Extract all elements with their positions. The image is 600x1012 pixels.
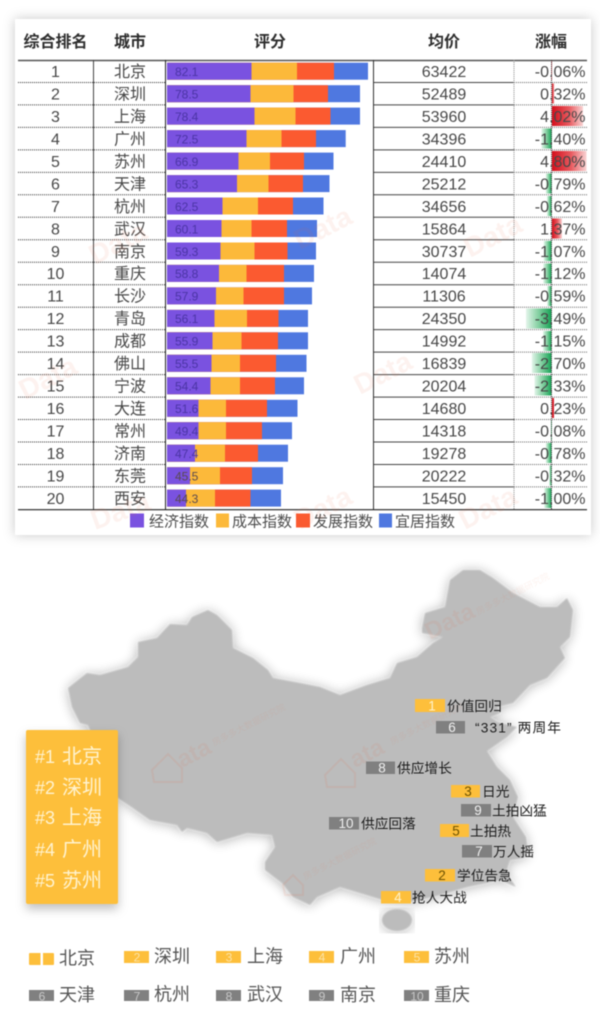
key 6: 天津 bbox=[59, 985, 95, 1005]
key 9: 南京 bbox=[340, 985, 376, 1005]
legend: score indices: 经济指数 bbox=[149, 514, 209, 530]
key 10: 10 bbox=[410, 990, 424, 1004]
column: average price: 52489 bbox=[422, 86, 466, 104]
bar row 18 bbox=[167, 445, 288, 462]
column: city names: 杭州 bbox=[114, 198, 146, 216]
column: price change percent: -0.08% bbox=[535, 424, 586, 440]
label 9: 9 bbox=[474, 803, 482, 818]
watermarks over table: Data bbox=[14, 350, 82, 405]
bar row 4 bbox=[167, 130, 346, 147]
key 2: 深圳 bbox=[154, 946, 190, 966]
legend: score indices: 发展指数 bbox=[313, 514, 373, 530]
key 2: 2 bbox=[134, 950, 141, 964]
column: average price: 14680 bbox=[422, 401, 466, 418]
bar row 20 bbox=[167, 490, 281, 507]
bar row 1: 82.1 bbox=[175, 65, 199, 79]
column: city names: 苏州 bbox=[114, 153, 146, 171]
table header row: 城市 bbox=[114, 32, 146, 51]
key 6: 6 bbox=[39, 990, 46, 1004]
column: average price: 24350 bbox=[422, 311, 466, 328]
column: rank numbers: 8 bbox=[51, 221, 60, 238]
label 2: 2 bbox=[438, 868, 446, 883]
column: price change percent: 0.23% bbox=[540, 401, 586, 418]
label 6: 6 bbox=[448, 720, 456, 735]
column: city names: 东莞 bbox=[114, 468, 146, 486]
key 10: 重庆 bbox=[434, 985, 470, 1005]
map: Hainan island bbox=[382, 909, 412, 931]
column: average price: 34396 bbox=[422, 131, 466, 148]
bar row 18: 47.4 bbox=[175, 447, 199, 461]
bar row 10: 58.8 bbox=[175, 267, 199, 281]
column: average price: 11306 bbox=[422, 289, 466, 306]
column: rank numbers: 12 bbox=[47, 311, 64, 328]
bar row 20: 44.3 bbox=[175, 492, 199, 506]
bar row 3 bbox=[167, 108, 360, 125]
bar row 19 bbox=[167, 467, 283, 484]
column: average price: 25212 bbox=[422, 176, 466, 193]
table header row: 评分 bbox=[254, 33, 286, 51]
map watermarks: 房多多大数据研究院 bbox=[210, 701, 287, 748]
key 2 bbox=[124, 946, 190, 966]
column: city names: 济南 bbox=[114, 445, 146, 463]
column: city names: 长沙 bbox=[114, 288, 146, 306]
column: city names bbox=[114, 63, 146, 508]
column: price change percent bbox=[535, 64, 586, 508]
column: price change percent: -1.12% bbox=[535, 266, 586, 283]
column: average price: 30737 bbox=[422, 244, 466, 261]
label 2: 学位告急 bbox=[457, 868, 512, 884]
key 8: 武汉 bbox=[247, 984, 283, 1004]
bar row 9 bbox=[167, 242, 316, 260]
column: price change percent: -0.78% bbox=[535, 446, 586, 463]
chart: stacked score bars bbox=[167, 63, 368, 507]
panel: city ranking table bbox=[14, 19, 591, 536]
bar row 17: 49.4 bbox=[175, 424, 199, 438]
column: rank numbers: 15 bbox=[47, 379, 64, 396]
column: price change percent: 4.02% bbox=[540, 109, 586, 126]
table header row: 均价 bbox=[428, 33, 460, 51]
map watermarks: 房多多大数据研究院 bbox=[474, 570, 551, 617]
map watermarks: 房多多大数据研究院 bbox=[301, 835, 378, 882]
column: city names: 重庆 bbox=[114, 265, 146, 283]
column: rank numbers: 20 bbox=[47, 491, 64, 508]
label 1: 1 bbox=[428, 698, 436, 714]
label 6: “331” 两周年 bbox=[475, 720, 561, 736]
column: average price: 53960 bbox=[422, 109, 466, 126]
legend: score indices: 成本指数 bbox=[232, 514, 292, 530]
column: city names: 北京 bbox=[114, 63, 146, 81]
bar row 7 bbox=[167, 198, 324, 214]
column: rank numbers: 7 bbox=[51, 199, 60, 216]
watermarks over table bbox=[14, 200, 527, 536]
key 9 bbox=[309, 985, 376, 1005]
label 1: 价值回归 bbox=[447, 698, 502, 714]
column: rank numbers: 16 bbox=[47, 401, 64, 418]
column: price change percent: -0.06% bbox=[535, 64, 586, 81]
column: price change percent: -1.15% bbox=[535, 334, 586, 351]
legend: city key bbox=[29, 946, 470, 1005]
legend: score indices bbox=[130, 514, 455, 530]
column: price change percent: -1.40% bbox=[535, 131, 586, 148]
column: rank numbers: 18 bbox=[47, 446, 64, 463]
callout: top 5 cities bbox=[26, 730, 118, 904]
column: price change percent: 1.37% bbox=[540, 221, 586, 238]
bar row 16 bbox=[167, 400, 298, 417]
column: price change percent: -1.07% bbox=[535, 244, 586, 261]
column: rank numbers: 1 bbox=[51, 64, 60, 81]
column: price change percent: -2.70% bbox=[535, 356, 586, 373]
bar row 4: 72.5 bbox=[175, 132, 199, 146]
table header row: 综合排名 bbox=[23, 32, 88, 51]
map watermarks bbox=[152, 570, 551, 895]
column: rank numbers: 5 bbox=[51, 154, 60, 171]
bar row 6 bbox=[167, 175, 330, 192]
bar row 7: 62.5 bbox=[175, 200, 199, 214]
column: city names: 上海 bbox=[114, 108, 146, 126]
label 3: 3 bbox=[464, 784, 472, 799]
column: city names: 深圳 bbox=[114, 86, 146, 104]
column: city names: 大连 bbox=[114, 400, 146, 418]
bar row 11: 57.9 bbox=[175, 290, 199, 304]
label 5: 土拍热 bbox=[470, 824, 511, 839]
column: average price: 34656 bbox=[422, 199, 466, 216]
label 5: 5 bbox=[452, 824, 460, 838]
column: price change percent: -0.32% bbox=[535, 468, 586, 486]
watermarks over table: Data bbox=[459, 208, 527, 263]
bar row 8 bbox=[167, 220, 317, 237]
key 7 bbox=[124, 984, 190, 1004]
bar row 6: 65.3 bbox=[175, 177, 199, 191]
label 1 bbox=[415, 698, 502, 714]
bar row 1 bbox=[167, 63, 368, 80]
column: average price: 24410 bbox=[422, 154, 466, 171]
column: rank numbers: 9 bbox=[51, 244, 60, 261]
key 4: 4 bbox=[319, 950, 326, 964]
label 8: 8 bbox=[378, 760, 386, 776]
label 3: 日光 bbox=[482, 784, 510, 800]
column: city names: 成都 bbox=[114, 333, 146, 351]
column: price change percent: 4.80% bbox=[540, 154, 586, 171]
bar row 9: 59.3 bbox=[175, 245, 199, 259]
watermarks over table: Data bbox=[454, 480, 522, 535]
key 5: 苏州 bbox=[434, 946, 470, 966]
bar row 12 bbox=[167, 310, 308, 327]
label 4: 4 bbox=[394, 890, 402, 905]
column: price change percent: -3.49% bbox=[535, 311, 586, 328]
label 3 bbox=[451, 784, 510, 800]
map watermarks: 房多多大数据研究院 bbox=[388, 700, 465, 747]
bar row 13: 55.9 bbox=[175, 335, 199, 349]
callout: top 5 cities: #2 深圳 bbox=[35, 776, 102, 799]
map watermarks: ata bbox=[345, 733, 389, 773]
key 8: 8 bbox=[226, 990, 233, 1004]
column: rank numbers bbox=[47, 64, 64, 508]
column: city names: 广州 bbox=[114, 130, 146, 148]
column: average price: 15450 bbox=[422, 491, 466, 508]
column: average price: 63422 bbox=[422, 64, 466, 81]
bar row 13 bbox=[167, 332, 308, 349]
map of China bbox=[68, 570, 573, 931]
key 7: 7 bbox=[134, 990, 141, 1004]
key 1: 北京 bbox=[59, 948, 95, 968]
column: city names: 常州 bbox=[114, 422, 146, 440]
legend: score indices: 宜居指数 bbox=[395, 514, 455, 530]
label 5 bbox=[440, 824, 511, 839]
callout: top 5 cities: #4 广州 bbox=[35, 838, 102, 861]
label 9 bbox=[461, 803, 547, 818]
column: city names: 武汉 bbox=[114, 220, 146, 238]
bar row 12: 56.1 bbox=[175, 312, 199, 326]
bar row 10 bbox=[167, 265, 314, 282]
column: average price: 14992 bbox=[422, 334, 466, 351]
column: rank numbers: 14 bbox=[47, 356, 64, 373]
column: average price bbox=[422, 64, 466, 508]
watermarks over table: Data bbox=[289, 480, 357, 535]
column: average price: 16839 bbox=[422, 356, 466, 373]
bar row 2 bbox=[167, 85, 360, 102]
column: rank numbers: 2 bbox=[51, 86, 60, 104]
column: rank numbers: 3 bbox=[51, 109, 60, 126]
bar row 14: 55.5 bbox=[175, 357, 199, 371]
bar row 5: 66.9 bbox=[175, 155, 199, 169]
key 6 bbox=[29, 985, 95, 1005]
bar row 14 bbox=[167, 355, 306, 372]
column: rank numbers: 10 bbox=[47, 266, 64, 283]
callout: top 5 cities: #1 北京 bbox=[35, 745, 102, 768]
bar row 5 bbox=[167, 153, 334, 170]
bar row 16: 51.6 bbox=[175, 402, 199, 416]
label 9: 土拍凶猛 bbox=[492, 804, 547, 818]
key 3: 上海 bbox=[247, 946, 283, 966]
column: rank numbers: 11 bbox=[47, 289, 64, 306]
label 7: 万人摇 bbox=[493, 844, 534, 860]
column: city names: 南京 bbox=[114, 243, 146, 261]
column: price change percent: -0.59% bbox=[535, 289, 586, 306]
key 10 bbox=[404, 985, 470, 1005]
key 1 bbox=[29, 948, 95, 968]
bar row 15 bbox=[167, 377, 304, 394]
key 4: 广州 bbox=[340, 946, 376, 966]
key 5: 5 bbox=[414, 950, 421, 964]
map labels bbox=[329, 698, 561, 906]
table header row bbox=[23, 32, 567, 51]
bar row 11 bbox=[167, 287, 312, 304]
key 9: 9 bbox=[319, 990, 326, 1004]
column: city names: 天津 bbox=[114, 175, 146, 193]
column: rank numbers: 6 bbox=[51, 176, 60, 193]
column: city names: 西安 bbox=[114, 490, 146, 508]
label 8: 供应增长 bbox=[397, 760, 452, 776]
bar row 15: 54.4 bbox=[175, 380, 199, 394]
key 4 bbox=[309, 946, 376, 966]
table header row: 涨幅 bbox=[535, 33, 567, 51]
watermarks over table: Data bbox=[349, 345, 417, 400]
column: average price: 15864 bbox=[422, 221, 466, 238]
bar row 3: 78.4 bbox=[175, 110, 199, 124]
label 10: 供应回落 bbox=[361, 816, 416, 832]
map watermarks: ata bbox=[172, 733, 216, 773]
watermarks over table: Data bbox=[86, 486, 154, 536]
label 10 bbox=[329, 816, 416, 832]
bar row 17 bbox=[167, 422, 292, 439]
label 4: 抢人大战 bbox=[412, 890, 467, 906]
column: average price: 19278 bbox=[422, 446, 466, 463]
map: mainland outline bbox=[68, 570, 573, 905]
column: price change percent: -2.33% bbox=[535, 379, 586, 396]
column: city names: 青岛 bbox=[114, 310, 146, 328]
column: rank numbers: 13 bbox=[47, 334, 64, 351]
label 8 bbox=[366, 760, 452, 776]
chart: price change bars bbox=[526, 61, 586, 508]
column: price change percent: -1.00% bbox=[535, 491, 586, 508]
label 6 bbox=[436, 720, 561, 736]
column: price change percent: -0.62% bbox=[535, 199, 586, 216]
key 8 bbox=[216, 984, 283, 1004]
key 3 bbox=[216, 946, 283, 966]
label 10: 10 bbox=[338, 816, 354, 831]
bar row 19: 45.5 bbox=[175, 470, 199, 484]
column: average price: 14074 bbox=[422, 266, 466, 283]
column: city names: 佛山 bbox=[114, 355, 146, 373]
key 3: 3 bbox=[226, 950, 233, 964]
column: average price: 14318 bbox=[422, 424, 466, 440]
column: price change percent: -0.79% bbox=[535, 176, 586, 193]
callout: top 5 cities: #5 苏州 bbox=[35, 869, 102, 892]
key 5 bbox=[404, 946, 470, 966]
key 7: 杭州 bbox=[154, 984, 190, 1004]
label 4 bbox=[381, 890, 467, 906]
column: rank numbers: 19 bbox=[47, 468, 64, 486]
bar row 8: 60.1 bbox=[175, 222, 199, 236]
map watermarks: Data bbox=[420, 597, 480, 645]
column: average price: 20204 bbox=[422, 379, 466, 396]
column: rank numbers: 17 bbox=[47, 424, 64, 440]
bar row 2: 78.5 bbox=[175, 88, 199, 102]
callout: top 5 cities: #3 上海 bbox=[35, 806, 102, 829]
watermarks over table: Data bbox=[84, 215, 152, 270]
label 7: 7 bbox=[475, 844, 483, 859]
label 2 bbox=[425, 868, 512, 884]
column: average price: 20222 bbox=[422, 468, 466, 486]
column: city names: 宁波 bbox=[114, 378, 146, 396]
label 7 bbox=[462, 844, 534, 860]
watermarks over table: Data bbox=[289, 200, 357, 255]
column: price change percent: 0.32% bbox=[540, 86, 586, 104]
column: rank numbers: 4 bbox=[51, 131, 60, 148]
